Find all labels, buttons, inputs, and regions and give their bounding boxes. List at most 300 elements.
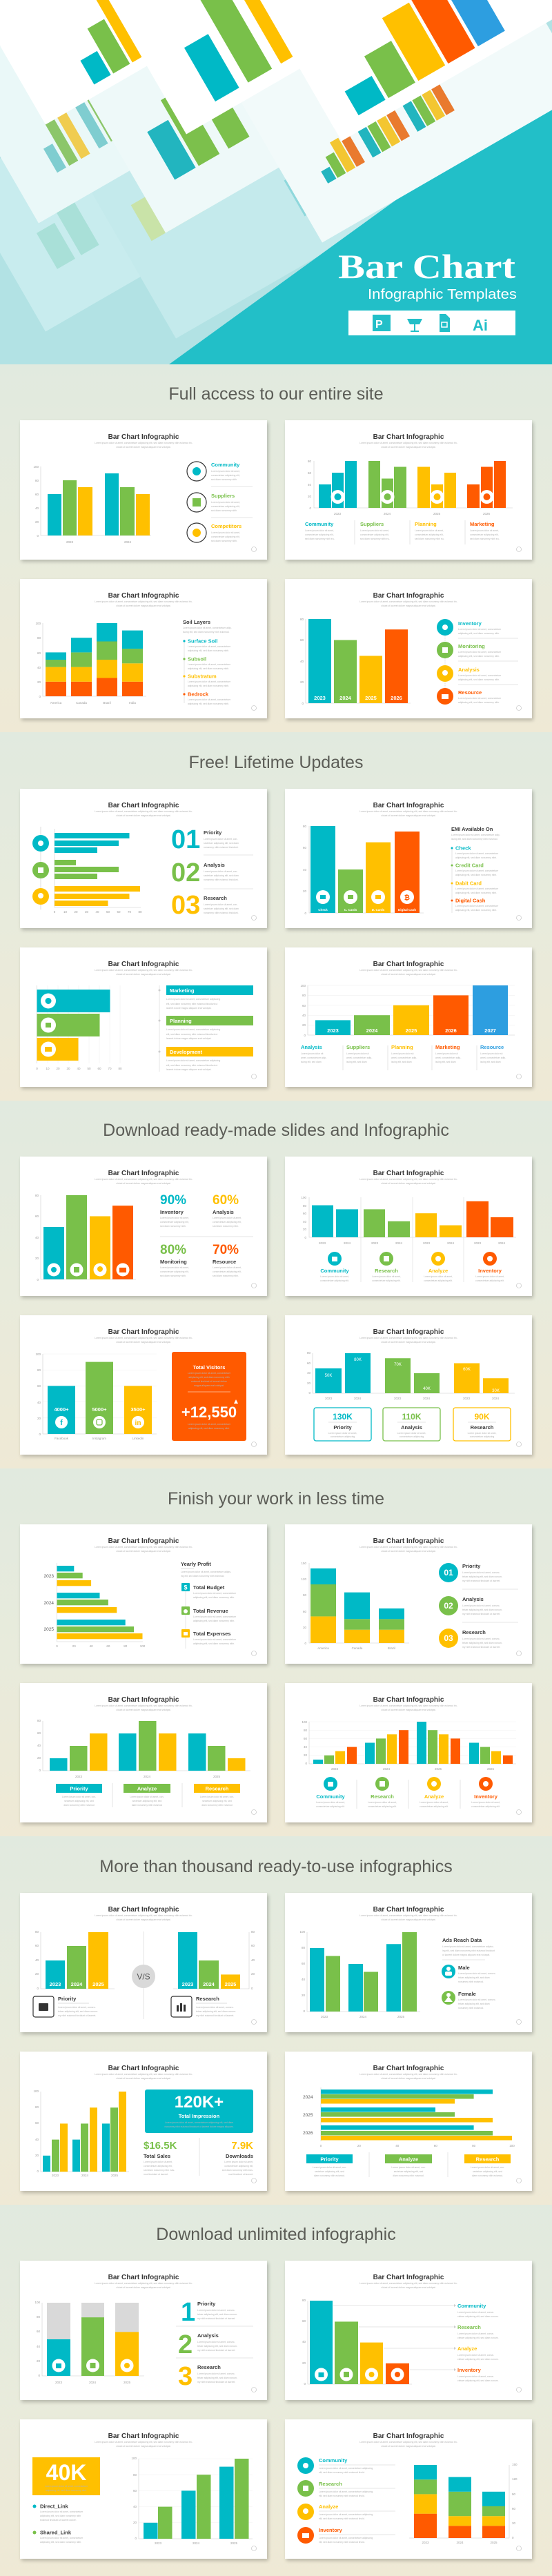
- slide: percentages: sed diam nonummy nibh.: [160, 1275, 186, 1277]
- slide: horizontal year bars: Analyze: [399, 2156, 418, 2163]
- slide: four-bar groups icons: consectetuer adipiscing elit.: [368, 1805, 397, 1808]
- slide: versus comparison: 40: [251, 1958, 255, 1962]
- slide: paired years with icons: Inventory: [478, 1268, 502, 1274]
- slide: horizontal year bars: 60: [434, 2144, 437, 2147]
- slide: grouped three years labels: Bar Chart Infographic: [108, 1696, 179, 1704]
- slide: 40K links: cidunt ut laoreet dolore magna aliquam erat volutpat.: [116, 2445, 171, 2448]
- slide: four bars inventory: [285, 579, 532, 718]
- slide: total impression: Lorem ipsum dolor sit amet,: [224, 2161, 253, 2163]
- slide: grouped bars community: Lorem ipsum dolor sit amet, consectetuer adipiscing elit, sed diam nonummy nibh euismod tin-: [95, 442, 193, 444]
- slide: five ascending years: amet, consectetuer adip-: [346, 1056, 372, 1059]
- slide: horizontal bars 01 02 03: sectetuer adipiscing elit, sed diam: [204, 842, 239, 845]
- slide: progress bars 1 2 3: 60: [37, 2330, 40, 2333]
- slide: descending bars with arrows: cidunt ut laoreet dolore magna aliquam erat volutpat.: [381, 2286, 436, 2289]
- slide: descending bars with arrows: Lorem ipsum dolor sit amet, conse-: [457, 2375, 494, 2378]
- slide: horizontal year bars: diam nonummy nibh euismod.: [314, 2174, 345, 2177]
- slide: social visitors: 100: [35, 1353, 41, 1356]
- slide: yearly profit horizontal: Bar Chart Infographic: [108, 1537, 179, 1545]
- slide: horizontal bars 01 02 03: sectetuer adipiscing elit, sed diam: [204, 874, 239, 877]
- slide: stacked with list: elit, sed diam nonummy nibh euismod tincid.: [319, 2517, 365, 2520]
- slide: percentages: consectetuer adipiscing elit,: [213, 1221, 241, 1223]
- slide: five ascending years: Bar Chart Infographic: [373, 961, 444, 968]
- slide: K values with boxes: 80K: [354, 1358, 362, 1362]
- slide: horizontal year bars: Priority: [320, 2156, 339, 2163]
- slide: paired years with icons: 40: [303, 1220, 306, 1223]
- slide: stacked with list: elit, sed diam nonummy nibh euismod tincid.: [319, 2495, 365, 2497]
- slide: horizontal bars 01 02 03: Lorem ipsum dolor sit amet, con-: [204, 870, 237, 873]
- slide: EMI available: Check: [455, 845, 471, 852]
- slide: grouped three years labels: Priority: [70, 1786, 88, 1791]
- slide: five ascending years: amet, consectetuer adip-: [435, 1056, 461, 1059]
- slide: stacked with list: 30: [512, 2521, 516, 2525]
- heading: Download ready-made: Download ready-made slides and Infographic: [103, 1121, 449, 1140]
- slide: four bars inventory: Resource: [458, 689, 482, 696]
- slide: stacked countries 01-03: 30: [303, 1626, 306, 1629]
- slide: progress bars 1 2 3: Lorem ipsum dolor sit amet, consec-: [197, 2372, 235, 2375]
- slide: five ascending years: 20: [302, 1023, 306, 1027]
- slide: percentages: Lorem ipsum dolor sit amet,: [160, 1266, 189, 1269]
- slide: K values with boxes: 2024: [492, 1397, 500, 1400]
- slide: paired years with icons: 2024: [498, 1241, 506, 1245]
- slide: soil layers stacked: adipiscing elit, sed diam nonummy nibh.: [188, 649, 229, 652]
- slide: versus comparison: Lorem ipsum dolor sit amet, consec-: [58, 2006, 96, 2009]
- slide: percentages: Lorem ipsum dolor sit amet,: [160, 1217, 189, 1219]
- slide: horizontal bars 01 02 03: 40: [95, 910, 99, 914]
- slide: yearly profit horizontal: $: [184, 1584, 188, 1591]
- slide: soil layers stacked: Surface Soil: [188, 638, 217, 645]
- slide: percentages: Monitoring: [160, 1259, 187, 1265]
- slide: versus comparison: V/S: [137, 1972, 150, 1982]
- slide: versus comparison: Lorem ipsum dolor sit amet, consec-: [196, 2006, 234, 2009]
- slide: percentages: 60%: [213, 1193, 239, 1208]
- slide: 40K links: 2025: [230, 2541, 238, 2545]
- slide: percentages: 40: [35, 1236, 39, 1239]
- slide: percentages: consectetuer adipiscing elit,: [160, 1270, 189, 1273]
- slide: total impression: mod tincidunt ut laoreet.: [144, 2173, 168, 2176]
- slide: K values with boxes: 20: [307, 1382, 310, 1385]
- slide: EMI available: Lorem ipsum dolor sit amet, consectetuer: [455, 905, 499, 907]
- slide: percentages: consectetuer adipiscing elit,: [213, 1270, 241, 1273]
- slide: total impression: consectetuer adipiscing elit,: [224, 2165, 253, 2167]
- slide: paired years with icons: 100: [301, 1196, 306, 1199]
- slide: social visitors: Lorem ipsum dolor sit amet, consectetuer adipiscing elit, sed diam nonummy nibh euismod tin-: [95, 1337, 193, 1339]
- slide: five ascending years: Lorem ipsum dolor sit amet, consectetuer adipiscing elit, sed diam nonummy nibh euismod tin-: [359, 969, 457, 972]
- slide: grouped three years labels: sectetuer adipiscing elit, sed: [132, 1800, 161, 1802]
- slide: five ascending years: iscing elit, sed diam: [435, 1061, 456, 1063]
- slide: social visitors: Lorem ipsum dolor sit amet, consectetuer: [188, 1423, 231, 1426]
- slide: ads reach data: 2024: [359, 2015, 367, 2018]
- slide: four groups bars: consectetuer adipiscing elit,: [305, 533, 334, 536]
- slide: percentages: sed diam nonummy nibh.: [213, 1275, 239, 1277]
- slide: versus comparison: tetuer adipiscing elit, sed diam nonum-: [196, 2010, 236, 2013]
- slide: stacked countries 01-03: cidunt ut laoreet dolore magna aliquam erat volutpat.: [381, 1550, 436, 1553]
- slide: K values with boxes: Bar Chart Infographic: [373, 1328, 444, 1336]
- slide: four bars inventory: 2023: [314, 695, 326, 701]
- slide: descending bars with arrows: Analyze: [457, 2346, 477, 2352]
- slide: four bars inventory: 2026: [391, 695, 402, 701]
- slide: progress bars 1 2 3: Analysis: [197, 2332, 219, 2339]
- slide: wide horizontal bars marketing: 60: [97, 1067, 101, 1070]
- slide: grouped three years labels: 2023: [75, 1775, 83, 1778]
- slide: yearly profit horizontal: Yearly Profit: [181, 1561, 211, 1567]
- slide: paired years with icons: 2023: [423, 1241, 431, 1245]
- slide: yearly profit horizontal: Total Revenue: [193, 1608, 228, 1614]
- slide: stacked countries 01-03: 150: [301, 1562, 306, 1565]
- slide: grouped three years labels: Lorem ipsum dolor sit amet, con-: [62, 1796, 96, 1798]
- slide: grouped three years labels: Lorem ipsum dolor sit amet, con-: [200, 1796, 234, 1798]
- slide: yearly profit horizontal: Total Budget: [193, 1584, 225, 1591]
- slide: stacked with list: cidunt ut laoreet dolore magna aliquam erat volutpat.: [381, 2445, 436, 2448]
- slide: social visitors: 3500+: [130, 1406, 146, 1413]
- slide: horizontal year bars: 100: [509, 2144, 515, 2147]
- slide: four-bar groups icons: 2023: [331, 1767, 339, 1771]
- slide: stacked countries 01-03: Bar Chart Infographic: [373, 1537, 444, 1545]
- slide: paired years with icons: Bar Chart Infographic: [373, 1170, 444, 1177]
- slide: social visitors: 20: [37, 1417, 41, 1420]
- slide: versus comparison: 80: [251, 1930, 255, 1934]
- slide: four-bar groups icons: Research: [371, 1793, 394, 1800]
- slide: horizontal bars 01 02 03: Bar Chart Infographic: [108, 802, 179, 809]
- slide: five ascending years: 100: [300, 984, 306, 987]
- slide: total impression: Total Sales: [144, 2153, 170, 2159]
- slide: horizontal bars 01 02 03: Lorem ipsum dolor sit amet, consectetuer adipiscing elit, sed diam nonummy nibh euismod tin-: [95, 810, 193, 813]
- slide: total impression: 2024: [81, 2174, 89, 2177]
- title: Bar Chart: Bar Chart: [338, 247, 515, 286]
- slide: EMI available: Lorem ipsum dolor sit amet, consectetuer adipiscing elit, sed diam nonummy nibh euismod tin-: [359, 810, 457, 813]
- slide: versus comparison: 0: [37, 1987, 39, 1990]
- slide: horizontal year bars: 2026: [303, 2131, 313, 2136]
- slide: four groups bars: 2024: [384, 512, 391, 515]
- slide: K values with boxes: 0: [308, 1391, 310, 1395]
- slide: four bars inventory: 80: [300, 618, 304, 621]
- slide: four bars inventory: adipiscing elit, sed diam nonummy nibh.: [458, 701, 500, 704]
- slide: percentages: Lorem ipsum dolor sit amet,: [213, 1217, 241, 1219]
- slide: K values with boxes: Research: [471, 1424, 494, 1430]
- slide: versus comparison: 0: [251, 1987, 253, 1990]
- slide: 40K links: Lorem ipsum dolor sit amet, consectetuer: [40, 2537, 83, 2539]
- slide: horizontal year bars: Bar Chart Infographic: [373, 2065, 444, 2072]
- slide: stacked countries 01-03: my nibh euismod tincidunt ut laoreet.: [462, 1580, 500, 1582]
- subtitle: Infographic Templates: [368, 287, 517, 302]
- slide: five ascending years: 2026: [445, 1028, 457, 1034]
- slide: descending bars with arrows: Lorem ipsum dolor sit amet, conse-: [457, 2332, 494, 2335]
- slide: horizontal bars 01 02 03: Research: [204, 895, 227, 901]
- slide: versus comparison: 2024: [71, 1981, 83, 1987]
- slide: paired years with icons: Lorem ipsum dolor sit amet, consectetuer adipiscing elit, sed diam nonummy nibh euismod tin-: [359, 1178, 457, 1181]
- slide: horizontal bars 01 02 03: 10: [63, 910, 67, 914]
- slide: four bars inventory: Lorem ipsum dolor sit amet, consectetuer: [458, 628, 502, 631]
- slide: stacked with list: Bar Chart Infographic: [373, 2432, 444, 2440]
- slide: percentages: 60: [35, 1215, 39, 1218]
- slide: ads reach data: tetuer adipiscing elit, sed diam: [458, 2003, 490, 2005]
- slide: versus comparison: my nibh euismod tincidunt ut laoreet.: [58, 2014, 96, 2017]
- slide: four groups bars: Planning: [415, 521, 437, 527]
- slide: five ascending years: Marketing: [435, 1044, 460, 1050]
- slide: K values with boxes: consectetuer adipiscing: [470, 1435, 494, 1438]
- slide: four bars inventory: adipiscing elit, sed diam nonummy nibh.: [458, 655, 500, 658]
- slide: EMI available: Bar Chart Infographic: [373, 802, 444, 809]
- slide: grouped bars community: 60: [35, 493, 39, 496]
- slide: 40K links: Lorem ipsum dolor sit amet, consectetuer: [45, 2485, 88, 2488]
- slide: yearly profit horizontal: adipiscing elit, sed diam nonummy nibh.: [193, 1596, 235, 1599]
- slide: EMI available: ₿: [404, 894, 410, 902]
- slide: soil layers stacked: Lorem ipsum dolor sit amet, consectetuer: [188, 680, 231, 683]
- slide: grouped three years labels: 0: [39, 1769, 41, 1772]
- slide: grouped bars community: Lorem ipsum dolor sit amet,: [211, 470, 240, 473]
- slide: yearly profit horizontal: cidunt ut laoreet dolore magna aliquam erat volutpat.: [116, 1550, 171, 1553]
- slide: total impression: Lorem ipsum dolor sit amet, consectetuer adipiscing elit, sed diam nonummy nibh euismod tin-: [95, 2073, 193, 2076]
- slide: descending bars with arrows: ctetuer adipiscing elit, sed diam nonum.: [457, 2315, 499, 2318]
- slide: social visitors: Instagram: [92, 1437, 106, 1440]
- slide: horizontal year bars: sectetuer adipiscing elit, sed: [315, 2170, 344, 2173]
- format icons box: [348, 311, 515, 335]
- slide: yearly profit horizontal: Lorem ipsum dolor sit amet, consectetuer: [193, 1592, 237, 1595]
- slide: social visitors: 4000+: [54, 1406, 69, 1413]
- slide: four-bar groups icons: Inventory: [474, 1793, 498, 1800]
- slide: horizontal bars 01 02 03: 50: [106, 910, 110, 914]
- slide: four-bar groups icons: 2025: [435, 1767, 442, 1771]
- slide: grouped bars community: 0: [37, 534, 39, 538]
- heading: Finish your work: Finish your work in less time: [168, 1489, 384, 1508]
- slide: social visitors: Bar Chart Infographic: [108, 1328, 179, 1336]
- slide: social visitors: Total Visitors: [193, 1364, 225, 1370]
- slide: versus comparison: cidunt ut laoreet dolore magna aliquam erat volutpat.: [116, 1918, 171, 1921]
- slide: progress bars 1 2 3: 40: [37, 2345, 40, 2348]
- slide: EMI available: EMI Available On: [451, 826, 493, 832]
- slide: yearly profit horizontal: Lorem ipsum dolor sit amet, consectetuer: [193, 1638, 237, 1641]
- slide: percentages: sed diam nonummy nibh.: [160, 1225, 186, 1228]
- slide: wide horizontal bars marketing: Development: [170, 1049, 203, 1055]
- slide: paired years with icons: 2023: [319, 1241, 326, 1245]
- slide: EMI available: Digital Cash: [398, 908, 416, 912]
- slide: percentages: sed diam nonummy nibh.: [213, 1225, 239, 1228]
- slide: versus comparison: Lorem ipsum dolor sit amet, consectetuer adipiscing elit, sed diam nonummy nibh euismod tin-: [95, 1914, 193, 1917]
- slide: progress bars 1 2 3: my nibh euismod tincidunt ut laoreet.: [197, 2381, 235, 2383]
- slide: paired years with icons: [285, 1157, 532, 1296]
- slide: 40K links: 2023: [155, 2541, 162, 2545]
- slide: horizontal year bars: sectetuer adipiscing elit, sed: [473, 2170, 502, 2173]
- slide: grouped three years labels: 20: [37, 1756, 41, 1760]
- slide: stacked countries 01-03: Brazil: [388, 1646, 395, 1650]
- slide: yearly profit horizontal: ing elit, sed diam nonummy nibh euismod.: [181, 1575, 224, 1577]
- slide: K values with boxes: Lorem ipsum dolor sit amet,: [468, 1432, 496, 1435]
- slide: grouped bars community: 100: [33, 465, 39, 469]
- slide: horizontal bars 01 02 03: 60: [117, 910, 121, 914]
- slide: paired years with icons: Lorem ipsum dolor sit amet,: [372, 1275, 401, 1278]
- slide: grouped bars community: Lorem ipsum dolor sit amet,: [211, 531, 240, 534]
- slide: five ascending years: amet, consectetuer adip-: [480, 1056, 506, 1059]
- slide: stacked with list: 150: [512, 2463, 518, 2466]
- slide: progress bars 1 2 3: 100: [34, 2301, 40, 2304]
- slide: grouped bars community: sed diam nonummy nibh.: [211, 509, 237, 512]
- slide: stacked countries 01-03: 0: [304, 1642, 306, 1645]
- slide: total impression: Lorem ipsum dolor sit amet, consectetuer adipiscing elit, sed diam: [165, 2121, 233, 2124]
- slide: horizontal year bars: Research: [476, 2156, 500, 2163]
- slide: yearly profit horizontal: [20, 1524, 267, 1664]
- slide: horizontal bars 01 02 03: Lorem ipsum dolor sit amet, con-: [204, 838, 237, 840]
- slide: grouped bars community: Bar Chart Infographic: [108, 433, 179, 441]
- slide: four bars inventory: 2024: [339, 695, 352, 701]
- slide: horizontal bars 01 02 03: [20, 789, 267, 928]
- slide: K values with boxes: Lorem ipsum dolor sit amet, consectetuer adipiscing elit, sed diam nonummy nibh euismod tin-: [359, 1337, 457, 1339]
- slide: wide horizontal bars marketing: 0: [36, 1067, 38, 1070]
- slide: percentages: 70%: [213, 1243, 239, 1257]
- slide: four-bar groups icons: Lorem ipsum dolor sit amet,: [420, 1801, 448, 1804]
- slide: paired years with icons: 2024: [344, 1241, 351, 1245]
- slide: 40K links: Lorem ipsum dolor sit amet, consectetuer adipiscing elit, sed diam nonummy nibh euismod tin-: [95, 2441, 193, 2444]
- slide: percentages: Lorem ipsum dolor sit amet,: [213, 1266, 241, 1269]
- slide: horizontal bars 01 02 03: cidunt ut laoreet dolore magna aliquam erat volutpat.: [116, 814, 171, 817]
- slide: grouped three years labels: diam nonummy nibh euismod: [201, 1804, 233, 1807]
- slide: total impression: 120K+: [175, 2093, 224, 2112]
- slide: five ascending years: Lorem ipsum dolor sit: [391, 1052, 413, 1055]
- slide: total impression: mod tincidunt ut laoreet.: [228, 2173, 253, 2176]
- slide: five ascending years: amet, consectetuer adip-: [301, 1056, 326, 1059]
- slide: soil layers stacked: [20, 579, 267, 718]
- slide: four-bar groups icons: Bar Chart Infographic: [373, 1696, 444, 1704]
- slide: EMI available: Lorem ipsum dolor sit amet, consectetuer: [455, 852, 499, 855]
- slide: grouped bars community: consectetuer adipiscing elit,: [211, 535, 240, 538]
- slide: stacked countries 01-03: Priority: [462, 1563, 481, 1569]
- slide: wide horizontal bars marketing: elit, sed diam nonummy nibh euismod tincidunt ut: [166, 1064, 217, 1067]
- slide: progress bars 1 2 3: 2023: [55, 2381, 63, 2384]
- slide: K values with boxes: 2023: [325, 1397, 333, 1400]
- slide: 40K links: 100: [131, 2457, 137, 2460]
- slide: stacked countries 01-03: 120: [301, 1577, 306, 1581]
- slide: grouped three years labels: diam nonummy nibh euismod: [132, 1804, 162, 1807]
- slide: four groups bars: Lorem ipsum dolor sit amet,: [415, 529, 444, 532]
- slide: horizontal bars 01 02 03: 0: [54, 910, 56, 914]
- slide: four groups bars: consectetuer adipiscing elit,: [415, 533, 444, 536]
- slide: horizontal year bars: diam nonummy nibh euismod.: [393, 2174, 424, 2177]
- slide: grouped three years labels: [20, 1683, 267, 1822]
- slide: soil layers stacked: Lorem ipsum dolor sit amet, consectetuer adip-: [183, 627, 232, 629]
- slide: four bars inventory: Bar Chart Infographic: [373, 592, 444, 600]
- slide: grouped bars community: consectetuer adipiscing elit,: [211, 505, 240, 508]
- slide: wide horizontal bars marketing: Lorem ipsum dolor sit amet, consectetuer adipiscing: [166, 1028, 220, 1031]
- slide: soil layers stacked: 0: [39, 695, 41, 698]
- slide: 40K links: Direct_Link: [40, 2504, 69, 2509]
- slide: total impression: 2023: [52, 2174, 59, 2177]
- slide: paired years with icons: consectetuer adipiscing elit.: [320, 1279, 349, 1282]
- slide: paired years with icons: 2024: [395, 1241, 403, 1245]
- slide: total impression: 80: [35, 2105, 39, 2109]
- slide: stacked countries 01-03: 02: [444, 1601, 453, 1611]
- slide: wide horizontal bars marketing: Lorem ipsum dolor sit amet, consectetuer adipiscing: [166, 998, 220, 1001]
- slide: progress bars 1 2 3: 80: [37, 2315, 40, 2319]
- slide: ads reach data: Lorem ipsum dolor sit amet, consec-: [458, 1972, 496, 1975]
- slide: five ascending years: cidunt ut laoreet dolore magna aliquam erat volutpat.: [381, 973, 436, 976]
- top slide facebook: [100, 0, 449, 135]
- slide: wide horizontal bars marketing: Lorem ipsum dolor sit amet, consectetuer adipiscing elit, sed diam nonummy nibh euismod tin-: [95, 969, 193, 972]
- slide: stacked countries 01-03: my nibh euismod tincidunt ut laoreet.: [462, 1613, 500, 1615]
- slide: ads reach data: 60: [302, 1962, 305, 1965]
- slide: percentages: 20: [35, 1257, 39, 1260]
- slide: social visitors: adipiscing elit, sed diam nonummy nibh.: [188, 1427, 230, 1430]
- slide: total impression: Lorem ipsum dolor sit amet,: [144, 2161, 172, 2163]
- slide: horizontal year bars: Lorem ipsum dolor sit amet, con-: [391, 2166, 426, 2169]
- slide: four-bar groups icons: consectetuer adipiscing elit.: [316, 1805, 345, 1808]
- slide: grouped three years labels: 2025: [213, 1775, 221, 1778]
- slide: paired years with icons: 20: [303, 1228, 306, 1231]
- slide: progress bars 1 2 3: Lorem ipsum dolor sit amet, consectetuer adipiscing elit, sed diam nonummy nibh euismod tin-: [95, 2282, 193, 2285]
- slide: K values with boxes: 40: [307, 1371, 310, 1375]
- slide: stacked with list: 90: [512, 2493, 516, 2496]
- slide: paired years with icons: 80: [303, 1204, 306, 1208]
- slide: stacked countries 01-03: America: [317, 1646, 329, 1650]
- slide: EMI available: 80: [303, 825, 306, 828]
- slide: stacked countries 01-03: Research: [462, 1629, 486, 1635]
- slide: ads reach data: Bar Chart Infographic: [373, 1906, 444, 1914]
- slide: horizontal bars 01 02 03: Priority: [204, 829, 222, 836]
- slide: versus comparison: 80: [35, 1930, 39, 1934]
- slide: progress bars 1 2 3: 2: [178, 2330, 193, 2359]
- slide: social visitors: [20, 1315, 267, 1455]
- slide: ads reach data: Lorem ipsum dolor sit amet, consectetuer adipisc-: [442, 1945, 494, 1948]
- slide: four-bar groups icons: Lorem ipsum dolor sit amet,: [368, 1801, 397, 1804]
- slide: grouped bars community: 40: [35, 507, 39, 510]
- slide: stacked countries 01-03: Lorem ipsum dolor sit amet, consec-: [462, 1571, 500, 1574]
- slide: soil layers stacked: 40: [37, 666, 41, 669]
- slide: stacked countries 01-03: Lorem ipsum dolor sit amet, consec-: [462, 1638, 500, 1640]
- slide: four-bar groups icons: 20: [304, 1753, 307, 1757]
- slide: grouped bars community: [20, 420, 267, 560]
- slide: ads reach data: Lorem ipsum dolor sit amet, consectetuer adipiscing elit, sed diam nonummy nibh euismod tin-: [359, 1914, 457, 1917]
- slide: progress bars 1 2 3: Priority: [197, 2301, 216, 2307]
- slide: 40K links: 0: [135, 2537, 137, 2540]
- slide: horizontal bars 01 02 03: Lorem ipsum dolor sit amet, con-: [204, 903, 237, 906]
- slide: yearly profit horizontal: 20: [72, 1644, 76, 1648]
- slide: social visitors: 40: [37, 1401, 41, 1404]
- slide: wide horizontal bars marketing: cidunt ut laoreet dolore magna aliquam erat volutpat.: [116, 973, 171, 976]
- slide: horizontal bars 01 02 03: 02: [171, 858, 200, 887]
- slide: wide horizontal bars marketing: Lorem ipsum dolor sit amet, consectetuer adipiscing: [166, 1059, 220, 1062]
- slide: descending bars with arrows: ctetuer adipiscing elit, sed diam nonum.: [457, 2337, 499, 2339]
- slide: four groups bars: consectetuer adipiscing elit,: [470, 533, 499, 536]
- slide: grouped three years labels: Analyze: [137, 1786, 157, 1791]
- slide: versus comparison: my nibh euismod tincidunt ut laoreet.: [196, 2014, 234, 2017]
- slide: five ascending years: Analysis: [301, 1044, 322, 1050]
- slide: percentages: cidunt ut laoreet dolore magna aliquam erat volutpat.: [116, 1182, 171, 1185]
- slide: four bars inventory: adipiscing elit, sed diam nonummy nibh.: [458, 678, 500, 681]
- slide: social visitors: f: [60, 1419, 63, 1427]
- heading: Download unlimited: Download unlimited infographic: [156, 2225, 396, 2244]
- slide: stacked with list: 0: [512, 2536, 514, 2539]
- slide: horizontal bars 01 02 03: Analysis: [204, 862, 225, 868]
- slide: yearly profit horizontal: adipiscing elit, sed diam nonummy nibh.: [193, 1642, 235, 1645]
- slide: five ascending years: 60: [302, 1004, 306, 1007]
- slide: stacked countries 01-03: 01: [444, 1568, 453, 1577]
- slide: five ascending years: [285, 947, 532, 1087]
- slide: paired years with icons: Analyze: [428, 1268, 448, 1274]
- slide: wide horizontal bars marketing: [20, 947, 267, 1087]
- slide: K values with boxes: 90K: [474, 1412, 490, 1422]
- slide: four-bar groups icons: Lorem ipsum dolor sit amet,: [316, 1801, 345, 1804]
- slide: grouped three years labels: Lorem ipsum dolor sit amet, consectetuer adipiscing elit, sed diam nonummy nibh euismod tin-: [95, 1704, 193, 1707]
- slide: wide horizontal bars marketing: 50: [87, 1067, 91, 1070]
- slide: percentages: 90%: [160, 1193, 186, 1208]
- slide: versus comparison: 40: [35, 1958, 39, 1962]
- slide: progress bars 1 2 3: Lorem ipsum dolor sit amet, consec-: [197, 2309, 235, 2312]
- slide: versus comparison: 2025: [92, 1981, 104, 1987]
- slide: percentages: Lorem ipsum dolor sit amet, consectetuer adipiscing elit, sed diam nonummy nibh euismod tin-: [95, 1178, 193, 1181]
- slide: versus comparison: 2023: [50, 1981, 61, 1987]
- slide: 40K links: adipiscing elit, sed diam nonummy nibh.: [46, 2489, 87, 2492]
- slide: descending bars with arrows: Research: [457, 2324, 481, 2330]
- slide: paired years with icons: 0: [304, 1236, 306, 1239]
- slide: four groups bars: Marketing: [470, 521, 495, 527]
- slide: four-bar groups icons: 2024: [383, 1767, 391, 1771]
